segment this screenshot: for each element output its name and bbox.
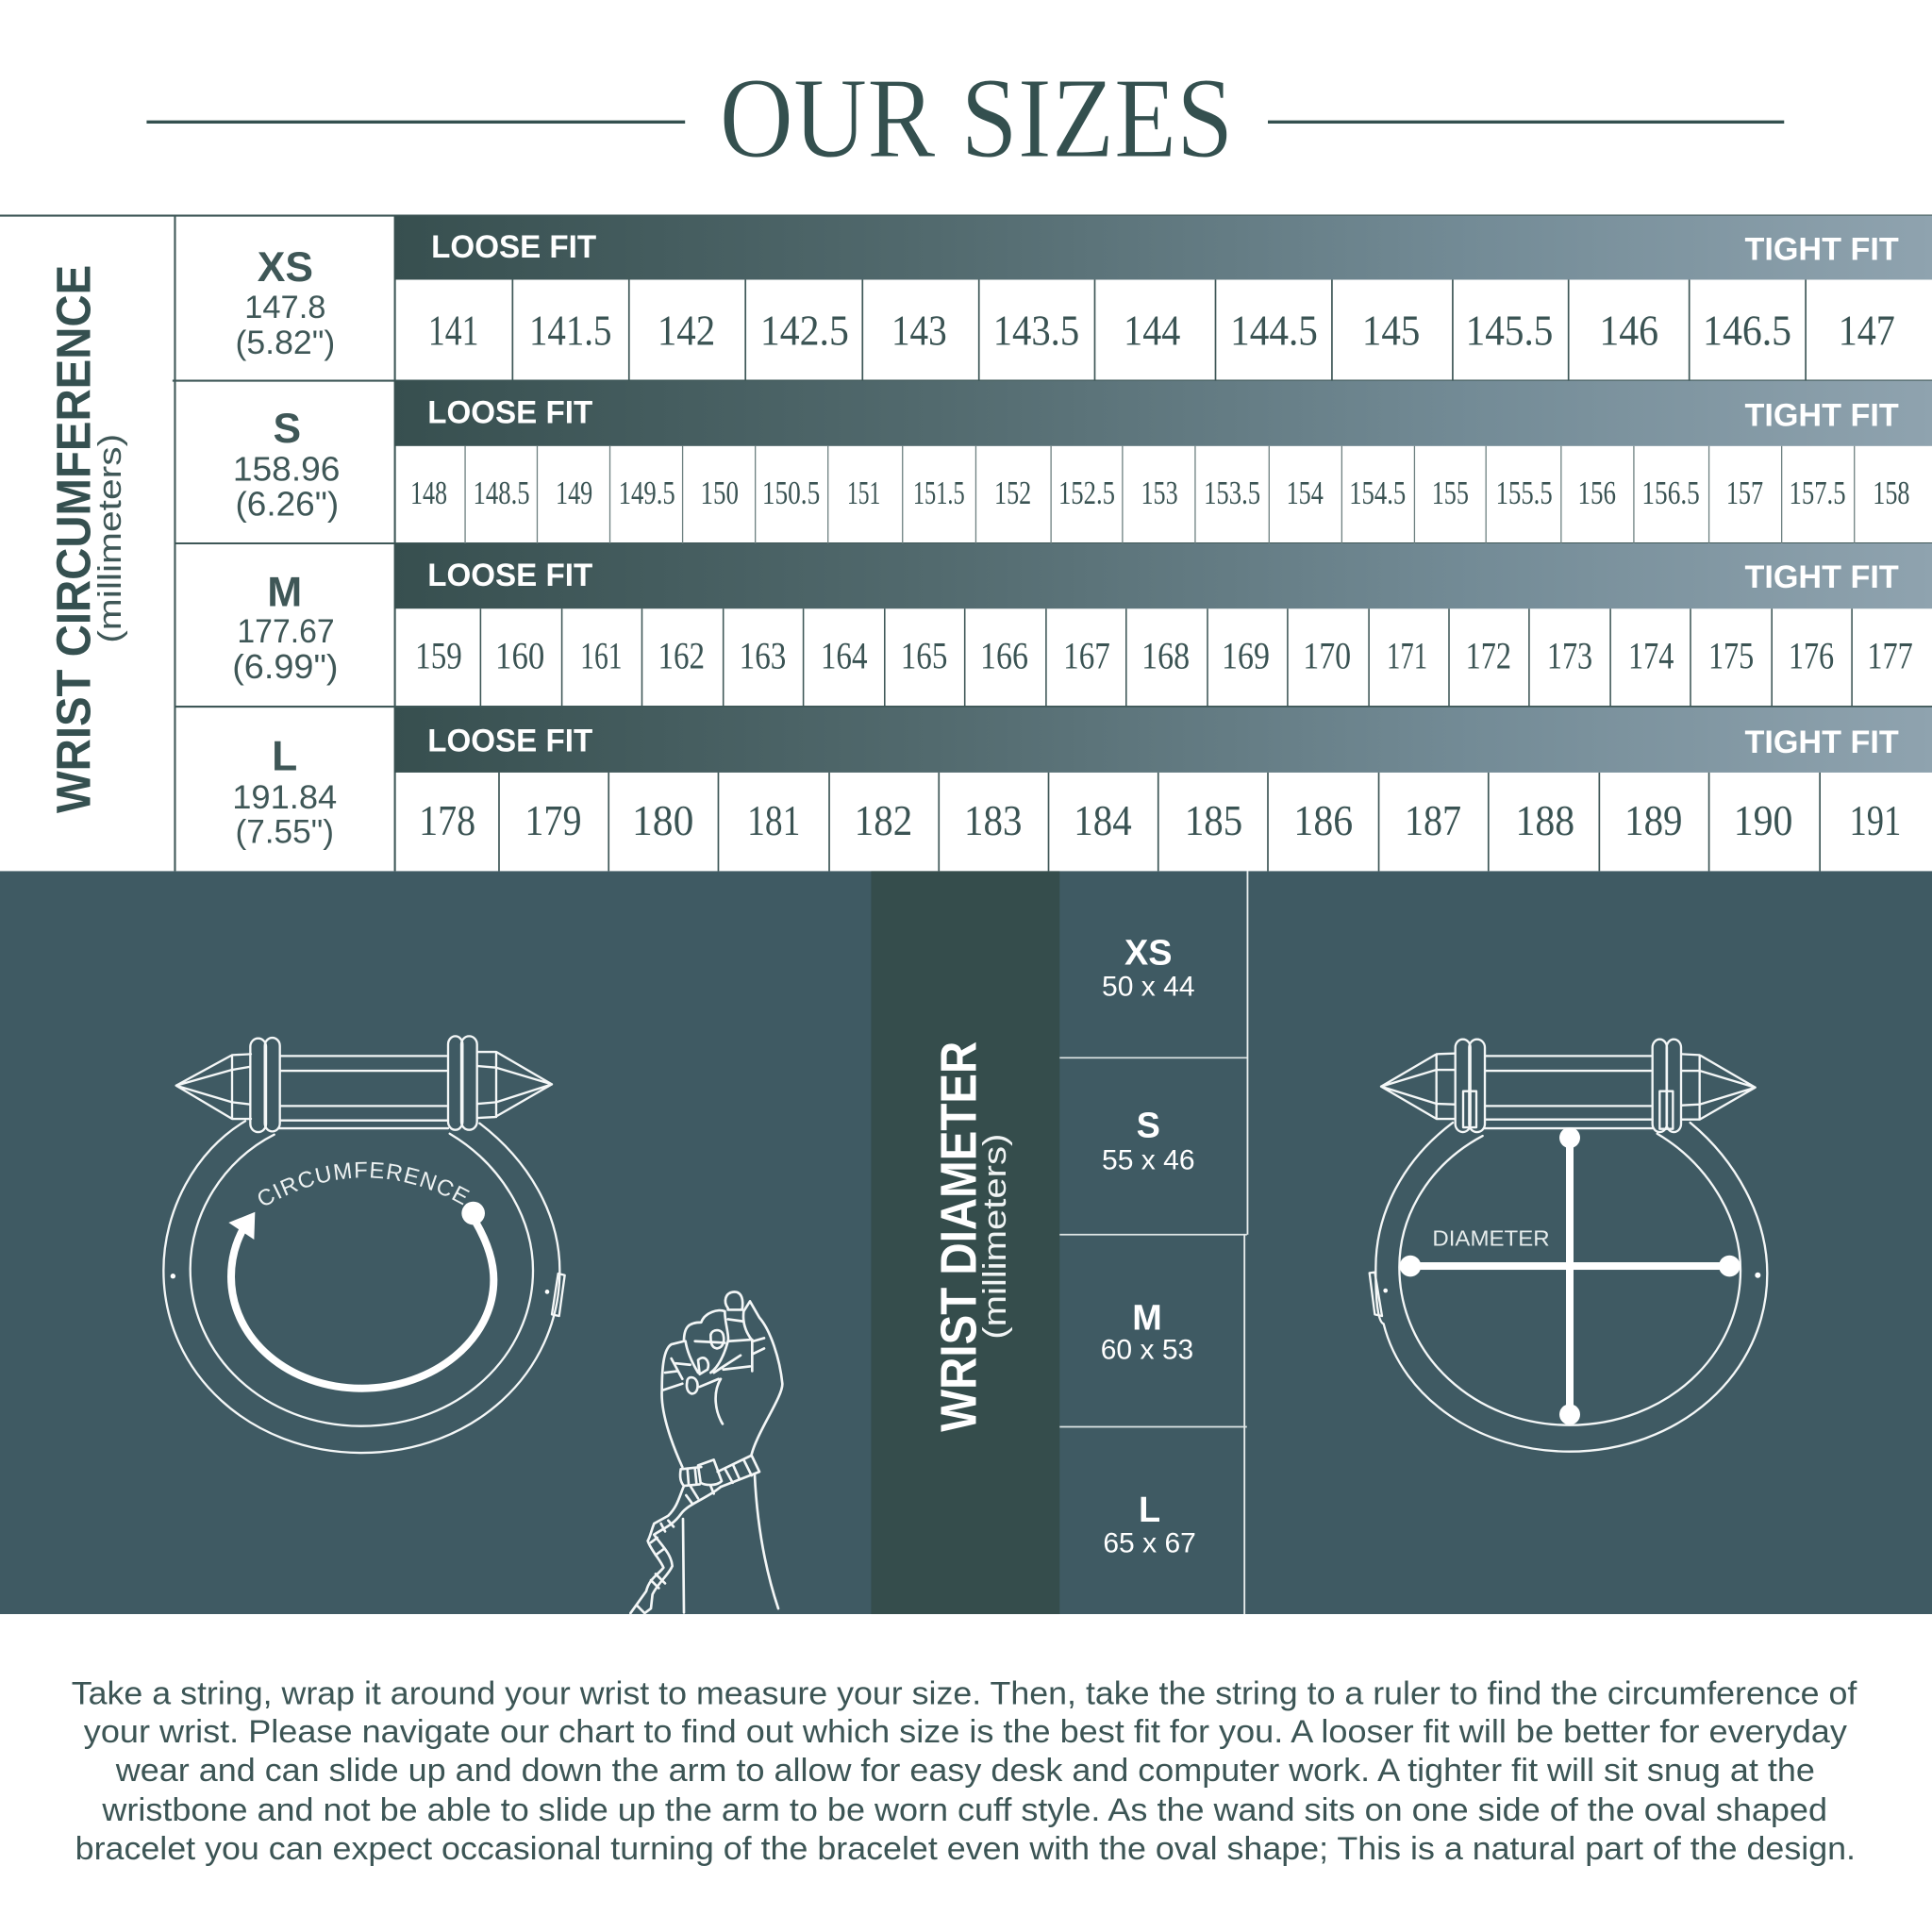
size label: S: S: [274, 406, 301, 452]
cell values: S row: 155.5: [1496, 475, 1553, 511]
cell values: S row: [410, 446, 1909, 543]
cell values: XS row: 146: [1599, 307, 1658, 355]
size label: XS: [235, 244, 335, 361]
cell values: M row: 177: [1867, 635, 1913, 677]
cell values: M row: 171: [1387, 635, 1427, 677]
cell values: M row: 163: [740, 635, 786, 677]
panel: wrist diameter column: [871, 871, 1059, 1614]
cell values: M row: 167: [1063, 635, 1110, 677]
size label: M: [232, 570, 339, 686]
cell values: XS row: 143: [891, 307, 947, 355]
diameter table: 65 x 67: [1103, 1528, 1196, 1559]
cell values: M row: 176: [1789, 635, 1834, 677]
cell values: L row: 179: [525, 796, 581, 844]
fit band: XS: TIGHT FIT: [1744, 232, 1899, 268]
cell values: XS row: 143.5: [993, 307, 1079, 355]
diameter table: M: [1132, 1298, 1162, 1338]
cell values: S row: 153.5: [1204, 475, 1260, 511]
cell values: S row: 148: [410, 475, 447, 511]
cell values: L row: 191: [1849, 796, 1901, 844]
arrow: circumference arc: [228, 1202, 493, 1389]
cell values: L row: 187: [1405, 796, 1461, 844]
size label: S: 158.96: [233, 449, 340, 488]
cell values: S row: 150: [701, 475, 739, 511]
cell values: XS row: 142: [658, 307, 715, 355]
cell values: M row: 165: [901, 635, 947, 677]
cell values: M row: 173: [1547, 635, 1592, 677]
cell values: M row: 164: [821, 635, 868, 677]
fit band: L: [394, 708, 1932, 773]
cell values: M row: 170: [1303, 635, 1351, 677]
icon: bracelet with circumference: [162, 1035, 566, 1455]
footer text block: Take a string, wrap it around your wrist to measure your size. Then, take the string to a ruler to find the circumference of: [72, 1675, 1857, 1711]
heading: wrist circumference: [46, 265, 128, 813]
size label: L: 191.84: [232, 779, 337, 816]
cell values: XS row: 144.5: [1230, 307, 1318, 355]
diameter table: XS: [1124, 934, 1173, 974]
cell values: L row: [419, 773, 1901, 871]
cell values: S row: 148.5: [474, 475, 530, 511]
cell values: S row: 150.5: [762, 475, 820, 511]
cell values: S row: 156.5: [1641, 475, 1700, 511]
fit band: M: [394, 543, 1932, 608]
cell values: S row: 155: [1432, 475, 1469, 511]
cell values: S row: 151.5: [913, 475, 965, 511]
diameter cross markers: [1400, 1127, 1740, 1424]
cell values: XS row: 146.5: [1703, 307, 1791, 355]
cell values: M row: 172: [1466, 635, 1511, 677]
diameter table: 50 x 44: [1102, 971, 1195, 1002]
size label: L: [232, 733, 337, 850]
size label: S: [233, 406, 340, 524]
cell values: XS row: 145: [1362, 307, 1420, 355]
size label: XS: XS: [258, 244, 313, 291]
fit band: S: LOOSE FIT: [427, 395, 592, 431]
cell values: XS row: 141.5: [529, 307, 611, 355]
cell values: L row: 181: [747, 796, 800, 844]
size label: XS: 147.8: [244, 290, 325, 325]
cell values: L row: 182: [855, 796, 912, 844]
heading: wrist diameter: (millimeters): [977, 1134, 1013, 1340]
footer text block: wristbone and not be able to slide up the arm to be worn cuff style. As the wand sits on one side of the oval shaped: [101, 1792, 1827, 1828]
panel: wrist circumference table: [0, 216, 1932, 871]
footer text block: [72, 1675, 1857, 1867]
cell values: XS row: 144: [1124, 307, 1180, 355]
fit band: L: LOOSE FIT: [427, 724, 592, 759]
cell values: S row: 149.5: [619, 475, 675, 511]
fit band: XS: LOOSE FIT: [431, 229, 596, 265]
cell values: S row: 152: [994, 475, 1031, 511]
cell values: S row: 154: [1287, 475, 1324, 511]
label: diameter: DIAMETER: [1432, 1226, 1550, 1251]
cell values: M row: 160: [495, 635, 544, 677]
fit band: L: TIGHT FIT: [1744, 724, 1899, 760]
cell values: XS row: 147: [1839, 307, 1895, 355]
cell values: L row: 190: [1734, 796, 1792, 844]
size label: M: (6.99"): [232, 647, 339, 686]
cell values: XS row: 145.5: [1466, 307, 1553, 355]
cell values: M row: 161: [580, 635, 623, 677]
size label: M: M: [267, 570, 302, 616]
cell values: S row: 157: [1726, 475, 1763, 511]
fit band: M: TIGHT FIT: [1744, 559, 1899, 595]
diameter table: 55 x 46: [1102, 1145, 1195, 1176]
fit band: XS: [394, 216, 1932, 279]
cell values: M row: 174: [1628, 635, 1674, 677]
footer text block: your wrist. Please navigate our chart to find out which size is the best fit for you. A looser fit will be better for everyday: [84, 1714, 1847, 1750]
cell values: M row: 168: [1141, 635, 1190, 677]
cell values: M row: [415, 608, 1913, 706]
label: circumference: CIRCUMFERENCE: [258, 1162, 470, 1206]
size label: M: 177.67: [237, 613, 335, 650]
heading: wrist diameter: WRIST DIAMETER: [930, 1041, 987, 1432]
heading: wrist circumference: WRIST CIRCUMFERENCE: [46, 265, 100, 813]
cell values: S row: 154.5: [1349, 475, 1406, 511]
cell values: L row: 185: [1185, 796, 1242, 844]
cell values: L row: 184: [1074, 796, 1132, 844]
cell values: S row: 151: [847, 475, 880, 511]
icon: hand with measuring tape: [630, 1291, 782, 1613]
cell values: S row: 152.5: [1058, 475, 1115, 511]
fit band: M: LOOSE FIT: [427, 558, 592, 593]
size label: XS: (5.82"): [235, 325, 335, 361]
diameter table: 60 x 53: [1101, 1335, 1193, 1366]
fit band: S: [394, 381, 1932, 446]
table grid lines: [0, 216, 1932, 871]
cell values: L row: 178: [419, 796, 475, 844]
panel: measurement illustrations: [0, 871, 1932, 1615]
cell values: L row: 186: [1293, 796, 1353, 844]
fit band: S: TIGHT FIT: [1744, 397, 1899, 433]
cell values: L row: 189: [1624, 796, 1683, 844]
cell values: S row: 149: [556, 475, 592, 511]
cell values: L row: 183: [964, 796, 1022, 844]
cell values: XS row: 142.5: [760, 307, 849, 355]
cell values: S row: 157.5: [1789, 475, 1846, 511]
cell values: XS row: [428, 279, 1895, 381]
cell values: M row: 169: [1222, 635, 1270, 677]
cell values: S row: 153: [1141, 475, 1178, 511]
size label: L: L: [272, 733, 297, 779]
cell values: M row: 159: [415, 635, 462, 677]
title: OUR SIZES: [720, 56, 1233, 182]
diameter table: S: [1137, 1107, 1160, 1146]
cell values: L row: 180: [632, 796, 693, 844]
icon: bracelet with diameter: [1370, 1040, 1767, 1452]
cell values: L row: 188: [1516, 796, 1574, 844]
footer text block: wear and can slide up and down the arm to allow for easy desk and computer work. A tighter fit will sit snug at the: [115, 1753, 1815, 1789]
size label: L: (7.55"): [235, 813, 334, 850]
heading: wrist diameter: [930, 1041, 1013, 1432]
cell values: XS row: 141: [428, 307, 478, 355]
heading: wrist circumference: (millimeters): [92, 434, 128, 643]
footer text block: bracelet you can expect occasional turning of the bracelet even with the oval shape; This is a natural part of the design.: [75, 1831, 1856, 1867]
diameter table: [1059, 871, 1247, 1614]
cell values: M row: 175: [1708, 635, 1754, 677]
size label: S: (6.26"): [235, 485, 339, 524]
diameter table: L: [1139, 1491, 1160, 1530]
cell values: M row: 162: [658, 635, 705, 677]
cell values: S row: 156: [1577, 475, 1616, 511]
cell values: M row: 166: [980, 635, 1028, 677]
cell values: S row: 158: [1873, 475, 1909, 511]
